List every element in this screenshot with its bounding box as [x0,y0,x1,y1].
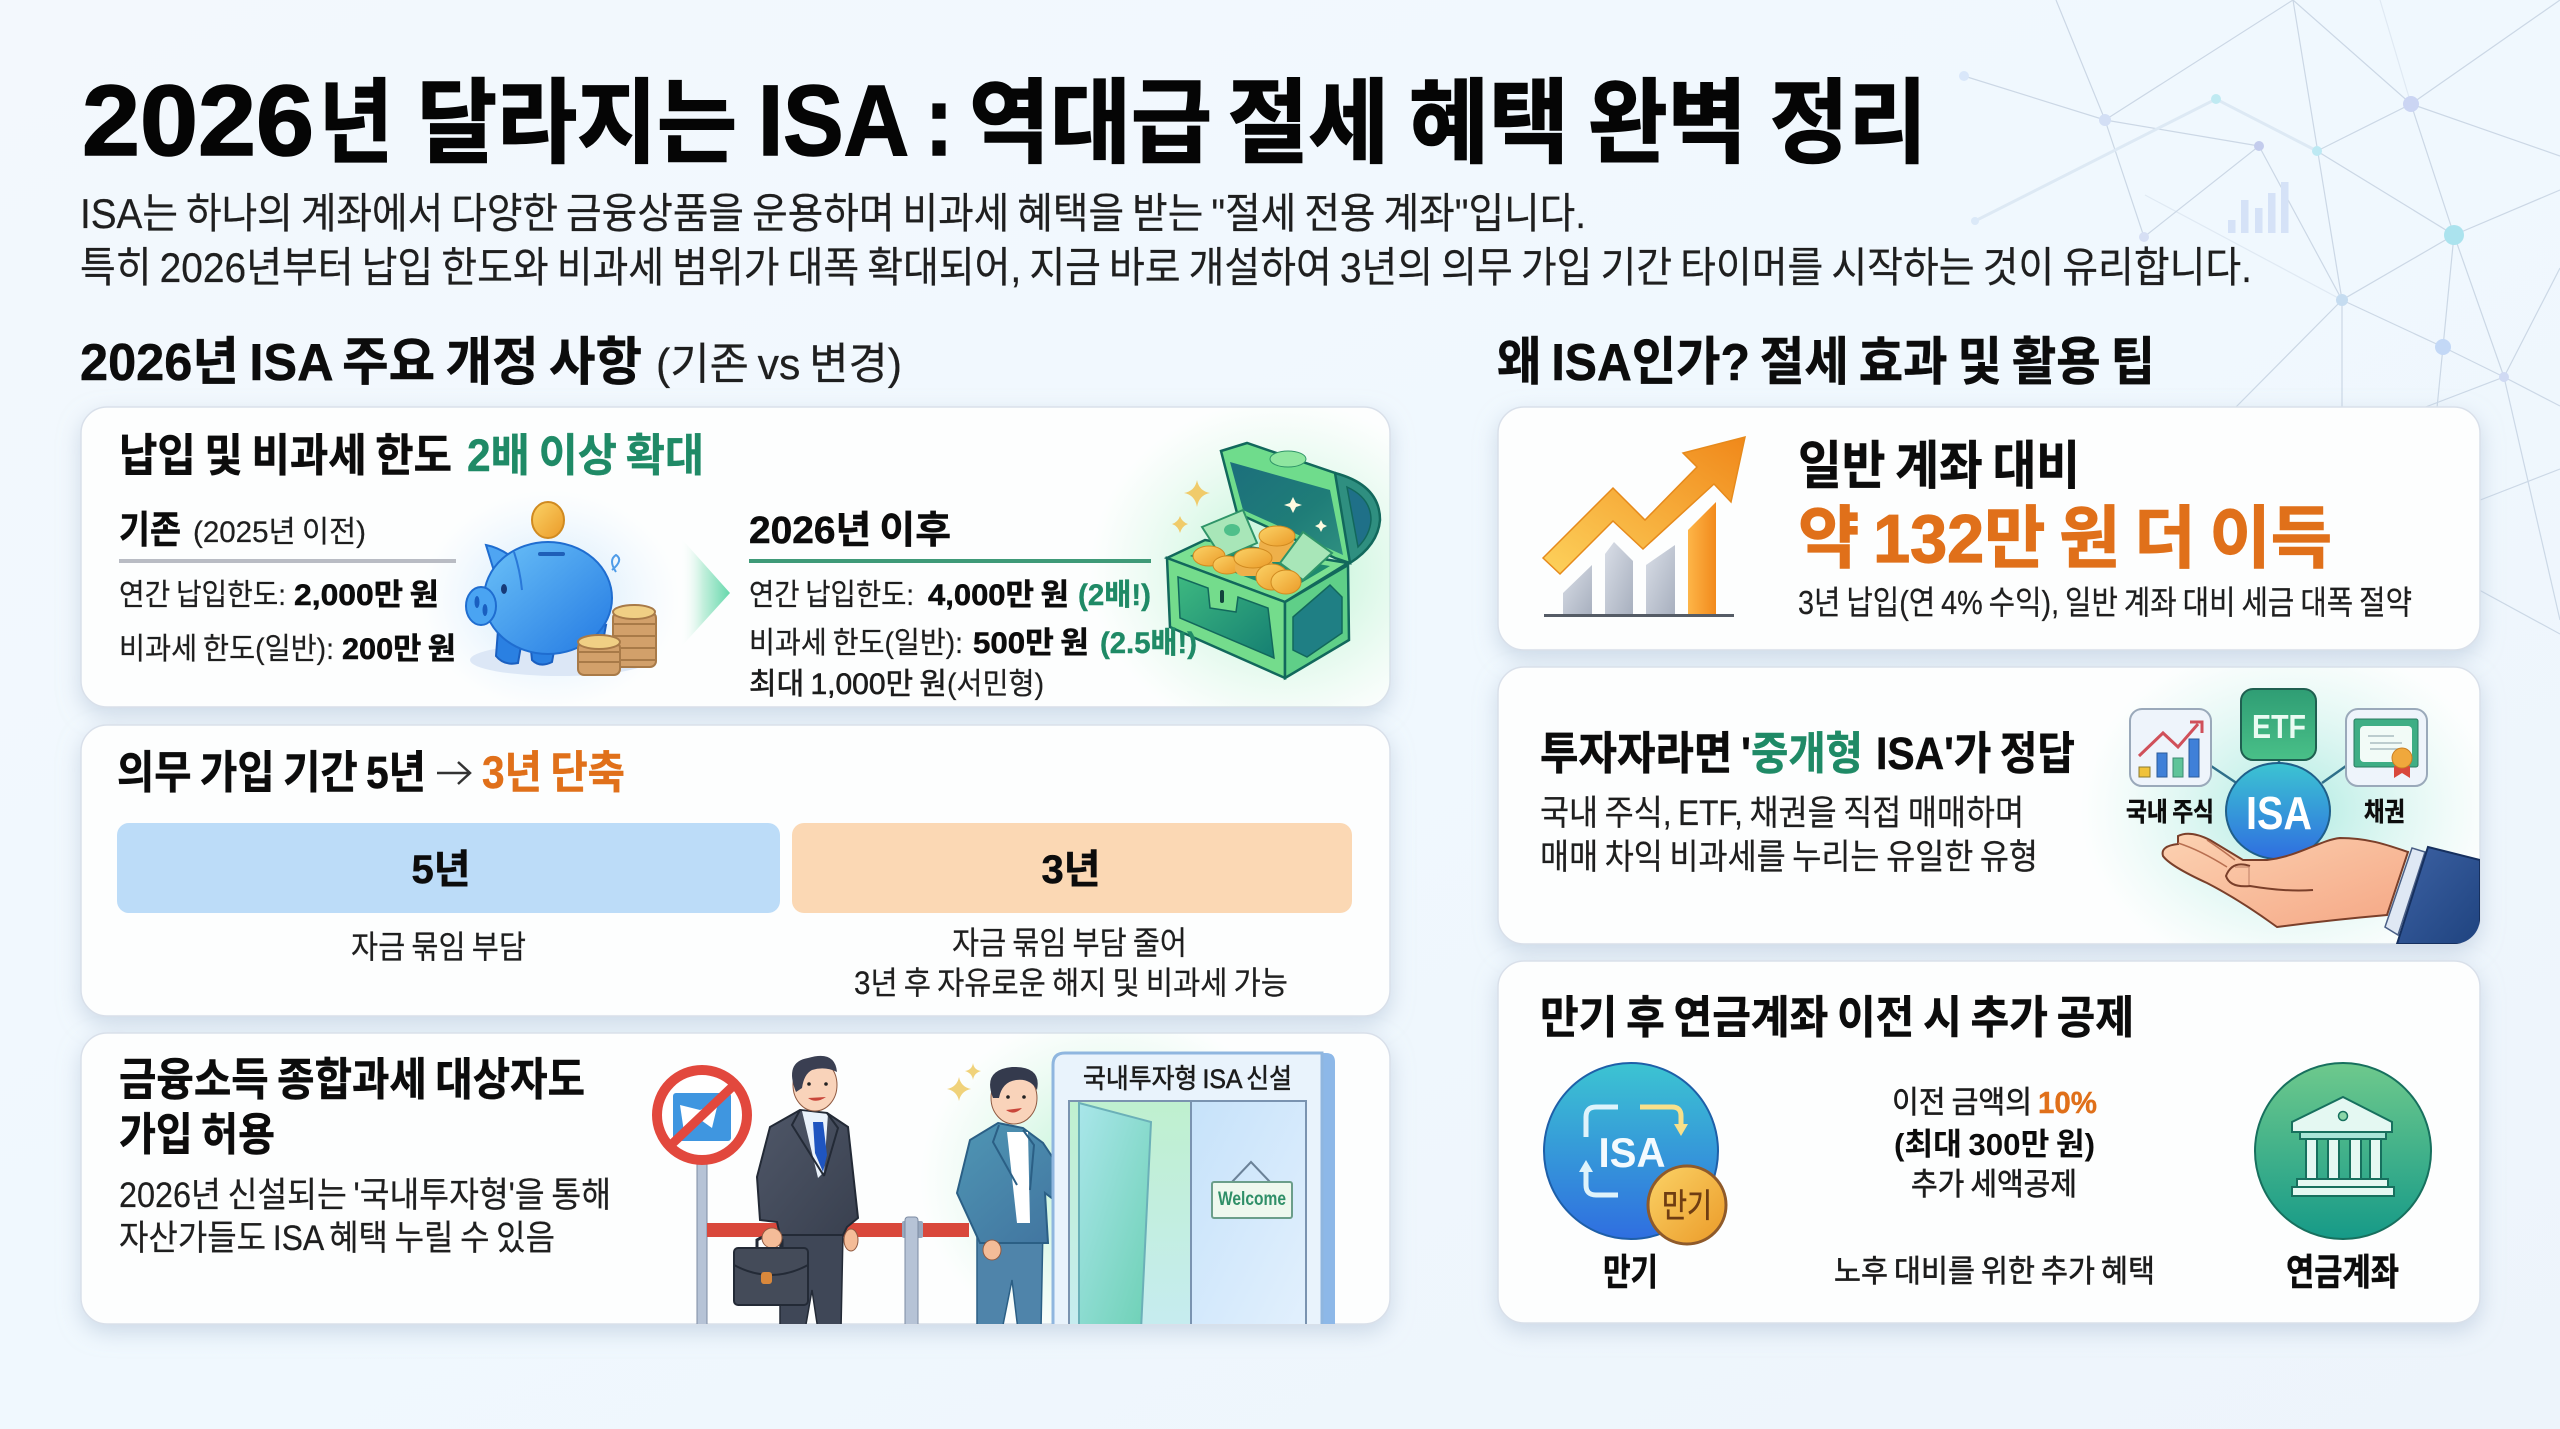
before column: 기존 [119,510,181,552]
panel heading: 납입 및 비과세 한도 [119,430,452,481]
door with sign: 국내투자형 ISA 신설 [1083,1064,1292,1094]
before column: 비과세 한도(일반): [119,633,334,666]
panel heading [119,430,704,481]
panel: mandatory period [81,725,1390,1016]
arrow: before to after [680,537,730,648]
bar: 5 years: 5년 [411,848,471,892]
center benefit text: 10% [2038,1085,2097,1120]
icon: rising chart [1543,437,1745,617]
intro text: 특히 2026년부터 납입 한도와 비과세 범위가 대폭 확대되어, 지금 바로 개설하여 3년의 의무 가입 기간 타이머를 시작하는 것이 유리합니다. [80,244,2252,291]
caption: 3 years [854,925,1288,1001]
bar: 3 years: 3년 [1041,848,1101,892]
savings text [1798,438,2412,621]
caption: 5 years: 자금 묶임 부담 [351,929,526,965]
background network decoration [1959,0,2560,634]
savings text: 일반 계좌 대비 [1798,438,2080,496]
panel: savings vs normal account [1498,407,2480,650]
diagram: ISA asset types on hand [2126,689,2480,944]
icon: stock chart box [2130,709,2211,786]
center benefit text: (최대 300만 원) [1894,1127,2095,1162]
icon: bond certificate box [2346,709,2427,786]
panel text: 중개형 [1751,728,1863,779]
panel body: 2026년 신설되는 '국내투자형'을 통해 [119,1176,611,1215]
icon: ISA maturity: 만기 [1662,1187,1712,1224]
title: 완벽 [1588,73,1747,175]
panel: contribution and tax-free limits [72,406,1399,724]
door with sign: Welcome [1218,1189,1286,1210]
caption: 3 years: 자금 묶임 부담 줄어 [952,925,1187,961]
heading: left section: 2026년 ISA 주요 개정 사항 [80,334,642,392]
after column: 최대 1,000만 원 [749,668,947,701]
title: ISA [758,65,909,177]
heading: right section: 왜 ISA인가? 절세 효과 및 활용 팁 [1497,334,2155,392]
bar: 3 years [792,823,1352,913]
briefcase [757,1236,782,1248]
box faces [1167,558,1285,678]
label: maturity: 만기 [1603,1252,1658,1293]
icon: piggy bank [466,502,656,676]
after column: (2배!) [1078,579,1151,612]
before column [119,510,456,666]
icon: treasure chest [1167,443,1380,678]
panel text: 투자자라면 ' [1540,728,1751,779]
panel text: 매매 차익 비과세를 누리는 유일한 유형 [1540,838,2038,877]
after column: 비과세 한도(일반): [749,627,963,660]
panel heading [117,747,625,798]
before column: 200만 원 [342,633,456,666]
panel heading: 가입 허용 [119,1109,275,1160]
ISA ball: ISA [2246,787,2312,839]
intro text: ISA는 하나의 계좌에서 다양한 금융상품을 운용하며 비과세 혜택을 받는 "절세 전용 계좌"입니다. [80,190,1586,237]
panel heading: 의무 가입 기간 5년 [117,747,426,798]
sparkles [1172,480,1210,533]
after column: 4,000만 원 [928,579,1069,612]
figure: man at door [956,1067,1052,1324]
bar: 5 years [117,823,780,913]
title: : [925,65,953,177]
panel: financial income taxpayers [81,1010,1390,1350]
lid [1221,443,1380,563]
center benefit text [1834,1085,2155,1289]
panel body: 자산가들도 ISA 혜택 누릴 수 있음 [119,1219,555,1258]
icon: ISA maturity: ISA [1598,1129,1666,1176]
title: 절세 [1228,73,1389,175]
panel heading [119,1054,585,1160]
panel text: ISA'가 정답 [1876,728,2075,779]
heading: left section: (기존 vs 변경) [656,340,902,389]
after column: 2026년 이후 [749,510,951,552]
diagram: ISA asset types on hand: 채권 [2364,797,2405,827]
icon: ISA maturity [1544,1063,1726,1244]
title: 역대급 [969,73,1212,175]
after column: 연간 납입한도: [749,579,914,612]
intro text [80,190,2252,291]
icon: no-entry sign and barrier [656,1069,969,1330]
center benefit text: 이전 금액의 [1892,1085,2032,1120]
coin stacks [578,605,656,675]
door with sign [1053,1053,1335,1330]
after column [749,510,1151,701]
after column: (서민형) [947,668,1044,701]
box rim and treasure [1167,540,1348,602]
center benefit text: 추가 세액공제 [1911,1167,2077,1202]
before column: (2025년 이전) [193,516,366,549]
before column: 연간 납입한도: [119,579,286,612]
savings text: 약 132만 원 더 이득 [1798,501,2332,577]
before column: 2,000만 원 [294,579,439,612]
icon: pension bank [2255,1063,2431,1239]
panel: pension transfer [1498,961,2480,1323]
icon: ETF box: ETF [2252,708,2306,745]
panel text: 국내 주식, ETF, 채권을 직접 매매하며 [1540,794,2024,833]
panel heading: 2배 이상 확대 [467,430,704,481]
savings text: 3년 납입(연 4% 수익), 일반 계좌 대비 세금 대폭 절약 [1798,584,2412,621]
panel body [119,1176,611,1258]
panel heading: 3년 단축 [482,747,625,798]
label: pension account: 연금계좌 [2286,1252,2399,1293]
after column: 500만 원 [973,627,1089,660]
panel text [1540,728,2075,877]
icon: ETF box [2241,689,2316,760]
figure: man with briefcase [734,1056,858,1330]
title: 정리 [1770,73,1927,175]
caption: 3 years: 3년 후 자유로운 해지 및 비과세 가능 [854,965,1288,1001]
icon: hand [2163,834,2480,944]
title: 2026 [82,65,314,177]
title: 달라지는 [417,73,737,175]
panel: brokerage ISA [1490,666,2488,960]
highlight: 2.5x label over chest: (2.5배!) [1100,627,1197,660]
labels: 국내 주식 [2126,797,2214,827]
panel heading: 만기 후 연금계좌 이전 시 추가 공제 [1540,992,2134,1043]
title: 년 [319,73,393,175]
ISA ball [2226,763,2330,859]
title [82,65,1927,177]
sparkles [947,1063,981,1101]
panel heading: 금융소득 종합과세 대상자도 [119,1054,585,1105]
title: 혜택 [1409,73,1569,175]
center benefit text: 노후 대비를 위한 추가 혜택 [1834,1254,2155,1289]
